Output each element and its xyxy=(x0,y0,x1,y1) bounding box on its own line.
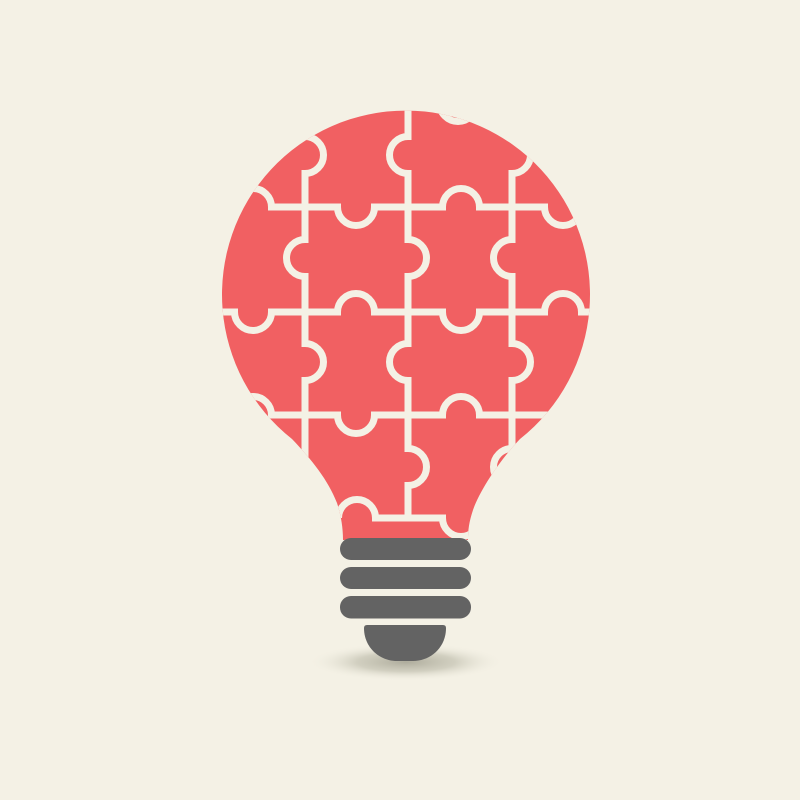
base cap xyxy=(364,625,446,661)
glass fill xyxy=(215,100,600,545)
bulb glass: red puzzle xyxy=(215,100,600,545)
thread bar 3 xyxy=(340,596,471,618)
thread bar 2 xyxy=(340,567,471,589)
thread bar 1 xyxy=(340,538,471,560)
puzzle piece seams xyxy=(220,100,600,536)
ground shadow xyxy=(308,643,504,681)
light bulb xyxy=(215,100,600,661)
screw base xyxy=(340,538,471,661)
